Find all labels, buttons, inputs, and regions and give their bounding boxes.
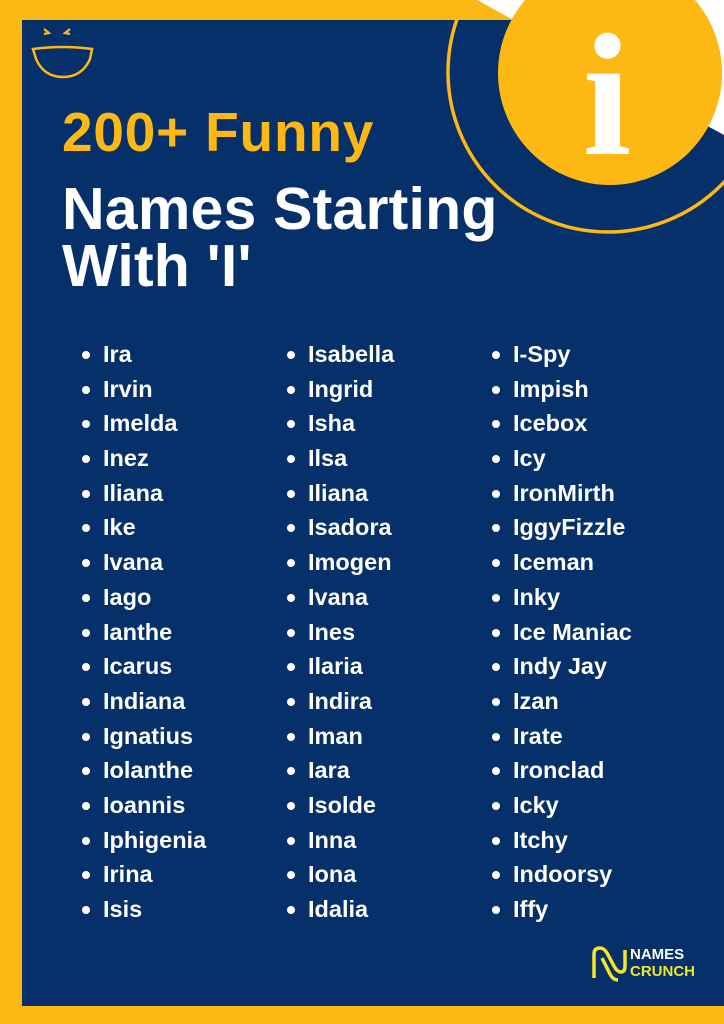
list column 2: Isolde <box>308 792 376 818</box>
list column 3: Iceman <box>513 549 594 575</box>
list column 1: Ianthe <box>103 618 172 644</box>
list column 3: Indoorsy <box>513 861 612 887</box>
list column 2: Isadora <box>308 514 392 540</box>
list column 3: Inky <box>513 584 560 610</box>
list column 1: Irina <box>103 861 153 887</box>
list column 3: Impish <box>513 376 589 402</box>
list column 1: Irvin <box>103 376 153 402</box>
list column 3: Itchy <box>513 827 568 853</box>
list column 3: Izan <box>513 688 559 714</box>
list column 2: Iara <box>308 757 350 783</box>
list column 1: Ioannis <box>103 792 185 818</box>
icon: info circle: i <box>583 0 631 192</box>
list column 3: IronMirth <box>513 480 615 506</box>
list column 1: Icarus <box>103 653 172 679</box>
list column 1: Iphigenia <box>103 827 206 853</box>
subtitle: Names Starting <box>62 176 498 242</box>
list column 2: Imogen <box>308 549 392 575</box>
list column 3: I-Spy <box>513 341 570 367</box>
list column 2: Isabella <box>308 341 394 367</box>
list column 2: Ilaria <box>308 653 363 679</box>
list column 3: Iffy <box>513 896 548 922</box>
list column 2: Iman <box>308 723 363 749</box>
list column 2: Ingrid <box>308 376 373 402</box>
list column 1: Isis <box>103 896 142 922</box>
subtitle <box>62 176 498 299</box>
list column 2: Ivana <box>308 584 368 610</box>
list column 1: Iago <box>103 584 151 610</box>
list column 2: Indira <box>308 688 372 714</box>
list column 2: Inna <box>308 827 356 853</box>
list column 1: Ivana <box>103 549 163 575</box>
list column 3: Ice Maniac <box>513 618 632 644</box>
list column 1 <box>82 341 206 922</box>
logo <box>592 946 695 982</box>
subtitle: With 'I' <box>62 233 252 299</box>
list column 1: Ike <box>103 514 136 540</box>
list column 3: Indy Jay <box>513 653 607 679</box>
list column 1: Indiana <box>103 688 185 714</box>
logo: NAMES <box>630 946 684 963</box>
list column 2: Isha <box>308 410 355 436</box>
list column 1: Iliana <box>103 480 163 506</box>
list column 2 <box>287 341 394 922</box>
icon: smile <box>31 28 94 78</box>
list column 2: Iona <box>308 861 356 887</box>
list column 2: Ines <box>308 618 355 644</box>
list column 2: Iliana <box>308 480 368 506</box>
list column 3: Icebox <box>513 410 587 436</box>
list column 1: Ignatius <box>103 723 193 749</box>
title: 200+ Funny <box>62 101 374 163</box>
list column 1: Iolanthe <box>103 757 193 783</box>
list column 2: Idalia <box>308 896 368 922</box>
list column 3: Ironclad <box>513 757 604 783</box>
list column 3: Icy <box>513 445 546 471</box>
list column 1: Imelda <box>103 410 177 436</box>
list column 3: Irate <box>513 723 563 749</box>
list column 3: IggyFizzle <box>513 514 625 540</box>
list column 3: Icky <box>513 792 559 818</box>
list column 1: Ira <box>103 341 132 367</box>
list column 2: Ilsa <box>308 445 347 471</box>
logo: CRUNCH <box>630 963 695 980</box>
list column 3 <box>492 341 632 922</box>
list column 1: Inez <box>103 445 149 471</box>
